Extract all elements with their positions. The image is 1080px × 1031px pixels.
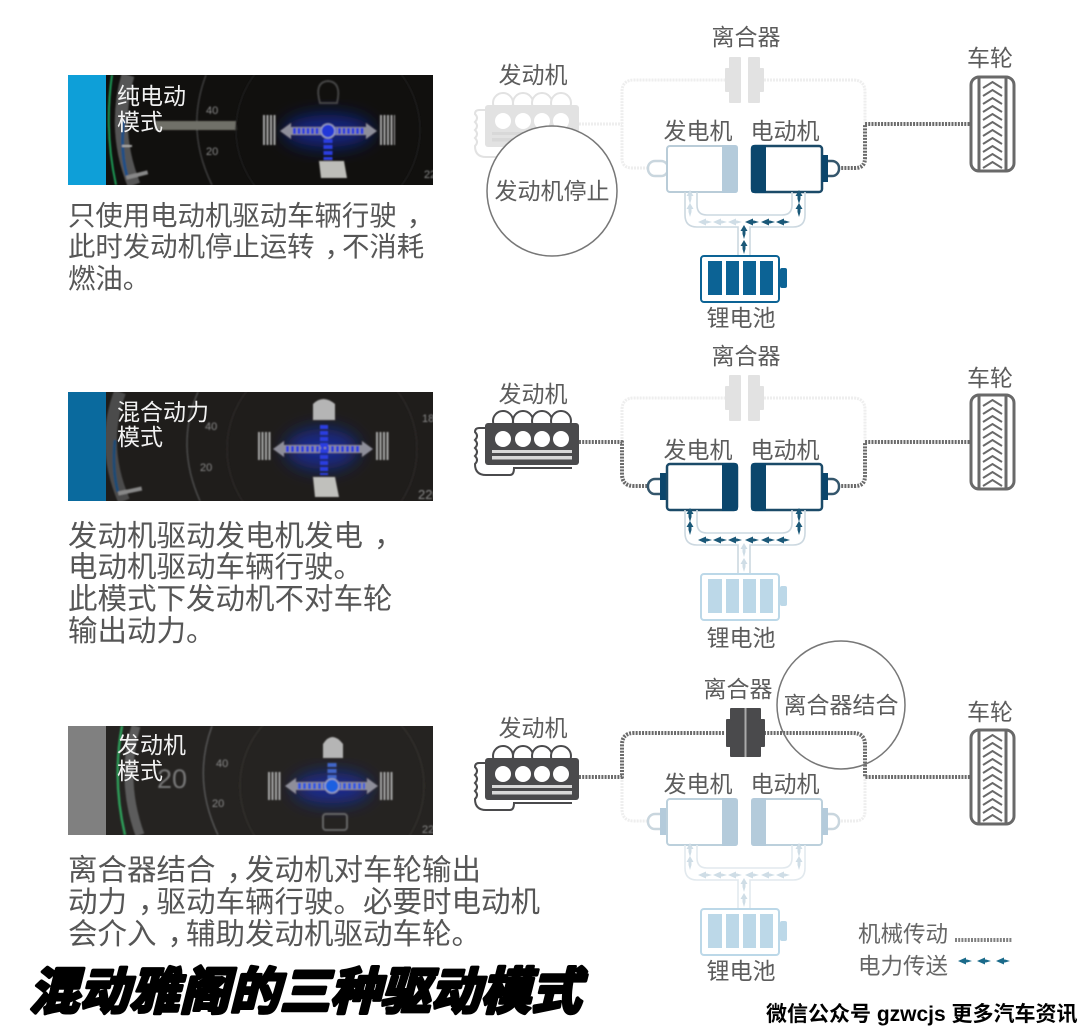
icon: clutch open [726, 58, 763, 102]
dashboard photo: engine: 22 [422, 824, 434, 836]
icon: motor active [751, 463, 839, 511]
legend [858, 922, 1012, 979]
label: clutch: 离合器 [712, 343, 780, 369]
description: 只使用电动机驱动车辆行驶 ， [68, 200, 434, 231]
icon: battery active [701, 256, 787, 302]
dashboard photo: engine: 20 [212, 798, 224, 810]
description: 此模式下发动机不对车轮 [68, 583, 393, 616]
description: 电动机驱动车辆行驶。 [68, 551, 363, 584]
icon: motor idle [751, 798, 839, 846]
icon: generator active [648, 463, 738, 511]
faint mechanical lines [622, 398, 865, 442]
dashboard photo: engine [68, 726, 433, 835]
label: motor: 电动机 [750, 437, 820, 463]
title: 混动雅阁的三种驱动模式 [26, 964, 592, 1020]
callout: clutch engaged [777, 641, 905, 769]
dashboard photo: pure electric: 40 [206, 105, 218, 117]
callout: clutch engaged: 离合器结合 [784, 692, 898, 718]
icon: engine on [475, 411, 579, 475]
label: battery: 锂电池 [706, 625, 776, 651]
dashboard photo: engine: 模式 [117, 758, 163, 784]
diagram: hybrid drivetrain [475, 343, 1014, 651]
description: 会介入 ，辅助发动机驱动车轮。 [68, 918, 481, 951]
dashboard photo: hybrid: 20 [200, 462, 212, 474]
icon: clutch engaged [727, 708, 764, 757]
diagram: pure electric drivetrain [475, 24, 1014, 331]
label: wheel: 车轮 [967, 45, 1013, 71]
legend: mechanical transmission: 机械传动 [858, 922, 948, 947]
description: 动力 ，驱动车辆行驶。必要时电动机 [68, 886, 540, 919]
icon: battery idle [701, 909, 787, 955]
faint mechanical lines [579, 80, 865, 168]
label: engine: 发动机 [498, 715, 568, 741]
panel: hybrid mode [68, 392, 433, 644]
dashboard photo: hybrid: 模式 [117, 424, 163, 450]
label: generator: 发电机 [664, 118, 732, 144]
diagram: engine drivetrain [475, 641, 1014, 984]
electric wires and arrows [685, 843, 805, 908]
dashboard photo: hybrid: 18 [422, 413, 434, 425]
icon: wheel [971, 395, 1014, 489]
description: 燃油。 [68, 263, 150, 294]
active mechanical lines [579, 442, 970, 486]
label: generator: 发电机 [664, 437, 732, 463]
dashboard photo: pure electric: 22 [424, 169, 436, 181]
mode label: 发动机 [117, 732, 186, 758]
label: clutch: 离合器 [704, 676, 772, 702]
panel: pure electric mode [68, 75, 433, 291]
icon: wheel [971, 77, 1014, 171]
label: generator: 发电机 [664, 771, 732, 797]
panel: engine mode [68, 726, 540, 948]
label: wheel: 车轮 [967, 699, 1013, 725]
label: battery: 锂电池 [706, 305, 776, 331]
dashboard photo: pure electric: 模式 [117, 109, 163, 135]
callout: engine stopped: 发动机停止 [494, 178, 610, 204]
mode label: 纯电动 [117, 83, 186, 109]
legend: electric transmission [858, 954, 1010, 979]
label: motor: 电动机 [750, 771, 820, 797]
icon: engine on [475, 746, 579, 810]
legend: electric transmission: 电力传送 [858, 954, 948, 979]
label: wheel: 车轮 [967, 365, 1013, 391]
dashboard photo: pure electric [68, 75, 433, 185]
dashboard photo: hybrid [68, 392, 433, 501]
faint mechanical lines [622, 777, 865, 821]
description: 输出动力。 [68, 615, 216, 648]
dashboard photo: pure electric: 20 [206, 146, 218, 158]
electric wires and arrows [685, 190, 805, 255]
label: battery: 锂电池 [706, 958, 776, 984]
dashboard photo: engine: 40 [216, 758, 228, 770]
icon: motor active [751, 145, 839, 193]
label: engine: 发动机 [498, 381, 568, 407]
dashboard photo: engine: 20 [157, 764, 187, 794]
description: 离合器结合 ，发动机对车轮输出 [68, 854, 481, 887]
icon: wheel [971, 730, 1014, 824]
active mechanical lines [579, 733, 970, 777]
label: engine: 发动机 [498, 62, 568, 88]
footer credit: 微信公众号 gzwcjs 更多汽车资讯 [766, 1003, 1078, 1026]
dashboard photo: hybrid: 40 [205, 421, 217, 433]
label: motor: 电动机 [750, 118, 820, 144]
icon: engine off [475, 93, 579, 157]
description: 此时发动机停止运转 ，不消耗 [68, 231, 424, 262]
dashboard photo: hybrid: 220 [418, 487, 440, 502]
label: clutch: 离合器 [712, 24, 780, 50]
icon: clutch open [726, 376, 763, 420]
icon: generator idle [648, 798, 738, 846]
mode label: 混合动力 [117, 399, 209, 425]
description: 发动机驱动发电机发电 ， [68, 520, 404, 553]
electric wires and arrows [685, 508, 805, 573]
active mechanical line to wheel [838, 124, 970, 168]
callout: engine stopped [487, 126, 617, 256]
icon: generator idle [648, 145, 738, 193]
icon: battery idle [701, 574, 787, 620]
